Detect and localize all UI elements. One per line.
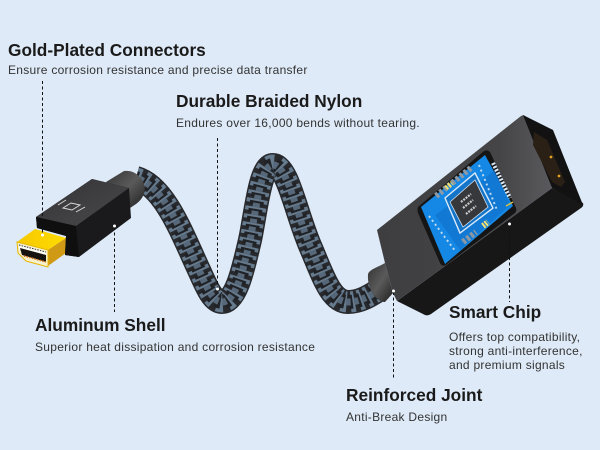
callout: smart chip — [449, 302, 583, 372]
callout: durable braided nylon — [176, 91, 420, 130]
callout: durable braided nylon: Durable Braided Nylon — [176, 91, 362, 111]
callout: gold-plated connectors: Ensure corrosion resistance and precise data transfer — [8, 63, 308, 77]
connector shell — [36, 179, 131, 257]
braided cable — [136, 165, 382, 302]
callout: gold-plated connectors: Gold-Plated Connectors — [8, 40, 206, 60]
leader dots — [41, 222, 511, 292]
strain relief collar — [106, 171, 145, 208]
chip outline — [445, 173, 493, 233]
chip — [450, 180, 488, 227]
leader lines — [42, 81, 510, 378]
HDMI adapter — [368, 115, 583, 315]
callout: durable braided nylon: Endures over 16,000 bends without tearing. — [176, 116, 420, 130]
mini DisplayPort connector — [17, 171, 145, 267]
callout: aluminum shell — [35, 315, 315, 354]
callout: aluminum shell: Aluminum Shell — [35, 315, 166, 335]
callout: reinforced joint: Anti-Break Design — [346, 410, 447, 424]
callout: gold-plated connectors — [8, 40, 308, 77]
callout: aluminum shell: Superior heat dissipation and corrosion resistance — [35, 340, 315, 354]
callout: reinforced joint — [346, 385, 482, 424]
board components — [436, 167, 472, 196]
callout: smart chip: Offers top compatibility, — [449, 330, 580, 344]
adapter collar — [368, 263, 393, 302]
circuit board window — [418, 150, 516, 266]
connector logo — [58, 200, 85, 212]
adapter body — [397, 188, 583, 315]
callout: smart chip: and premium signals — [449, 358, 565, 372]
callout: smart chip: strong anti-interference, — [449, 344, 583, 358]
callout: reinforced joint: Reinforced Joint — [346, 385, 482, 405]
HDMI port — [533, 132, 565, 187]
callout: smart chip: Smart Chip — [449, 302, 541, 322]
gold plug — [17, 229, 66, 267]
